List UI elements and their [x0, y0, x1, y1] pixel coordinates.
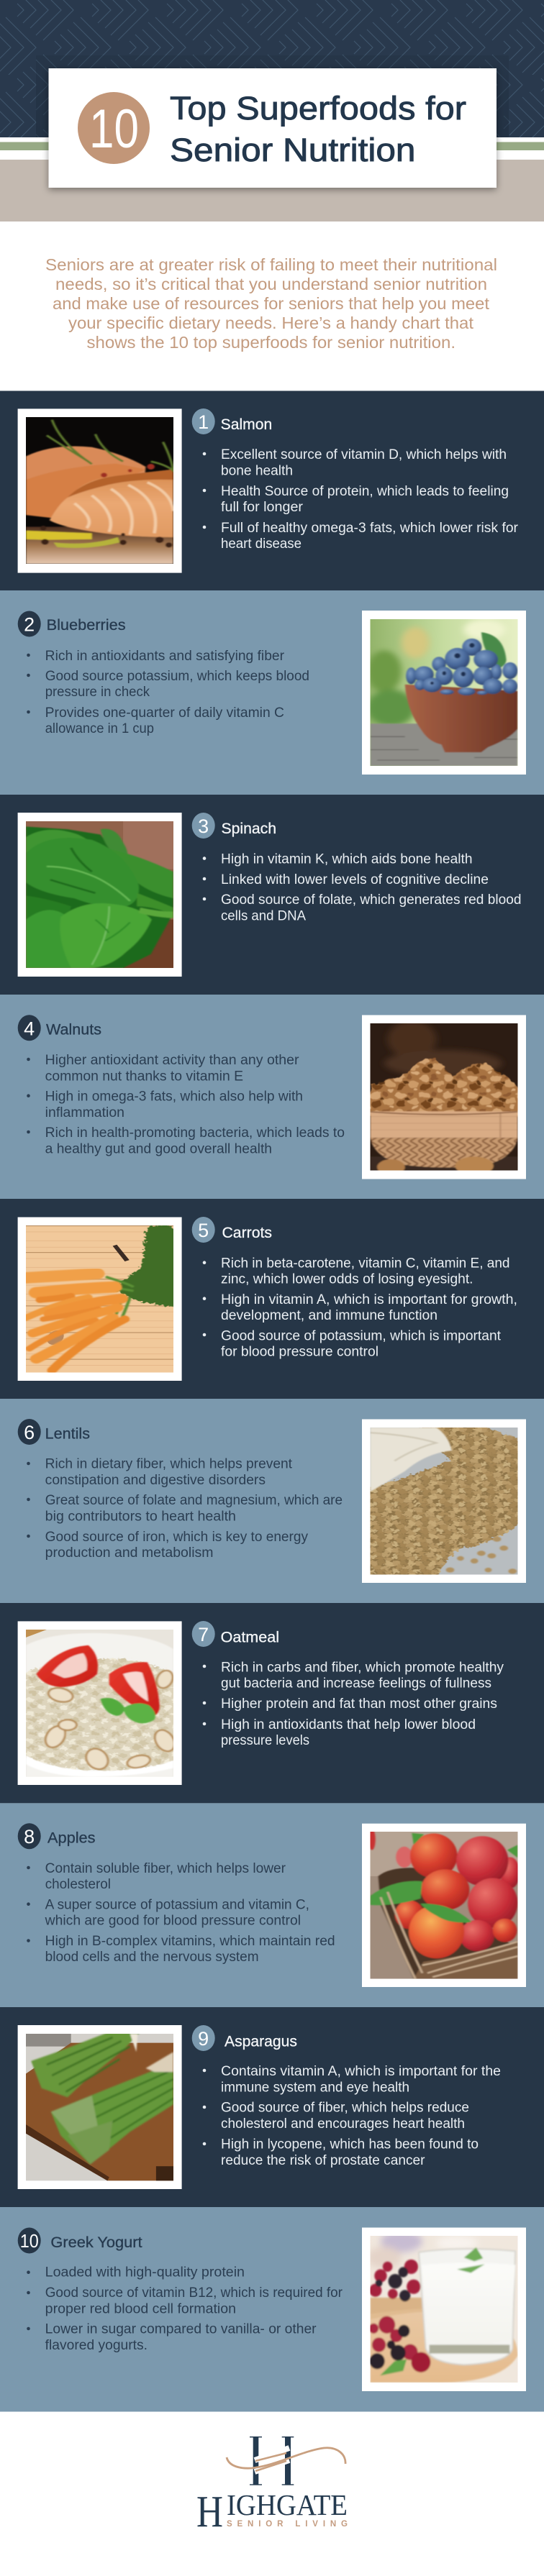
panel: salmon: [0, 391, 544, 590]
bullet list: lentils: big contributors to heart health: [45, 1509, 236, 1525]
title card: [49, 68, 497, 188]
bullet list: lentils: Great source of folate and magnesium, which are: [45, 1493, 343, 1508]
panel: spinach: [0, 795, 544, 995]
bullet list: oatmeal: gut bacteria and increase feelings of fullness: [221, 1676, 491, 1691]
number badge: 3: [192, 813, 215, 839]
photo: greek yogurt: [362, 2228, 526, 2391]
number badge: 7: [192, 1621, 215, 1647]
heading: Asparagus: Asparagus: [225, 2034, 297, 2050]
bullet list: lentils: constipation and digestive disorders: [45, 1473, 266, 1488]
number badge: 4: [18, 1015, 41, 1041]
logo wordmark: IGHGATE: [227, 2488, 348, 2521]
title heading: Senior Nutrition: [170, 132, 416, 168]
bullet list: lentils: production and metabolism: [45, 1545, 214, 1561]
bullet list: greek yogurt: Good source of vitamin B12, which is required for: [45, 2285, 343, 2301]
bullet list: walnuts: [27, 1053, 345, 1157]
bullet list: salmon: bone health: [221, 464, 293, 479]
bullet list: spinach: High in vitamin K, which aids bone health: [221, 852, 472, 867]
heading: Salmon: Salmon: [221, 416, 272, 433]
panel: oatmeal: [0, 1603, 544, 1803]
bullet list: salmon: heart disease: [221, 536, 302, 552]
bullet list: lentils: Rich in dietary fiber, which helps prevent: [45, 1457, 293, 1472]
bullet list: walnuts: common nut thanks to vitamin E: [45, 1069, 243, 1084]
intro paragraph: your specific dietary needs. Here’s a handy chart that: [68, 314, 473, 332]
number badge: 10: 10: [20, 2230, 39, 2252]
heading: Blueberries: Blueberries: [47, 617, 126, 634]
bullet list: apples: which are good for blood pressure control: [45, 1914, 301, 1929]
panel: asparagus: [0, 2007, 544, 2207]
bullet list: apples: Contain soluble fiber, which helps lower: [45, 1861, 286, 1876]
bullet list: greek yogurt: Lower in sugar compared to vanilla- or other: [45, 2321, 317, 2337]
bullet list: carrots: for blood pressure control: [221, 1345, 378, 1360]
bullet list: greek yogurt: [27, 2265, 343, 2353]
bullet list: blueberries: Rich in antioxidants and satisfying fiber: [45, 649, 285, 664]
photo: asparagus: [18, 2025, 182, 2189]
bullet list: walnuts: Higher antioxidant activity than any other: [45, 1053, 299, 1068]
number badge: 4: 4: [24, 1018, 35, 1039]
title heading: [170, 90, 466, 168]
bullet list: carrots: High in vitamin A, which is important for growth,: [221, 1292, 517, 1307]
bullet list: walnuts: High in omega-3 fats, which also help with: [45, 1090, 303, 1105]
bullet list: spinach: [203, 852, 521, 923]
bullet list: asparagus: reduce the risk of prostate cancer: [221, 2153, 425, 2168]
bullet list: asparagus: High in lycopene, which has been found to: [221, 2137, 479, 2152]
bullet list: walnuts: a healthy gut and good overall health: [45, 1142, 272, 1157]
photo: apples: [362, 1824, 526, 1987]
logo mark: H with swoosh: [227, 2436, 345, 2485]
number badge: 7: 7: [198, 1624, 209, 1645]
logo wordmark: H: [196, 2488, 223, 2536]
bullet list: blueberries: Provides one-quarter of daily vitamin C: [45, 705, 284, 721]
photo: spinach: [18, 813, 182, 977]
logo tagline: SENIOR LIVING: [227, 2520, 348, 2529]
number badge: 9: [192, 2025, 215, 2051]
bullet list: walnuts: Rich in health-promoting bacteria, which leads to: [45, 1125, 345, 1141]
intro paragraph: needs, so it’s critical that you understand senior nutrition: [55, 275, 487, 293]
bullet list: salmon: Excellent source of vitamin D, which helps with: [221, 447, 507, 462]
heading: Apples: Apples: [47, 1830, 95, 1847]
heading: Carrots: Carrots: [222, 1225, 272, 1241]
bullet list: spinach: Good source of folate, which generates red blood: [221, 892, 521, 908]
bullet list: carrots: development, and immune function: [221, 1308, 438, 1323]
bullet list: spinach: cells and DNA: [221, 908, 306, 923]
bullet list: blueberries: Good source potassium, which keeps blood: [45, 669, 309, 684]
bullet list: blueberries: allowance in 1 cup: [45, 721, 154, 736]
bullet list: apples: [27, 1861, 335, 1965]
number badge: 5: 5: [198, 1220, 209, 1241]
logo wordmark: [196, 2488, 348, 2536]
bullet list: oatmeal: Higher protein and fat than most other grains: [221, 1696, 497, 1712]
panel: greek yogurt: [0, 2207, 544, 2412]
heading: Spinach: Spinach: [222, 821, 276, 837]
number badge: 9: 9: [198, 2028, 209, 2050]
bullet list: apples: A super source of potassium and vitamin C,: [45, 1898, 309, 1913]
bullet list: carrots: zinc, which lower odds of losing eyesight.: [221, 1272, 473, 1287]
photo: salmon: [18, 408, 182, 573]
photo: lentils: [362, 1420, 526, 1583]
bullet list: apples: cholesterol: [45, 1877, 111, 1892]
bullet list: lentils: [27, 1457, 343, 1561]
photo: carrots: [18, 1217, 182, 1381]
panel: lentils: [0, 1399, 544, 1603]
photo: blueberries: [362, 611, 526, 775]
number badge: 8: [18, 1823, 41, 1849]
bullet list: lentils: Good source of iron, which is key to energy: [45, 1530, 308, 1545]
bullet list: spinach: Linked with lower levels of cognitive decline: [221, 872, 489, 887]
bullet list: carrots: Good source of potassium, which is important: [221, 1329, 502, 1343]
bullet list: apples: High in B-complex vitamins, which maintain red: [45, 1934, 335, 1949]
panel: apples: [0, 1803, 544, 2007]
bullet list: salmon: Full of healthy omega-3 fats, which lower risk for: [221, 521, 519, 536]
bullet list: oatmeal: [203, 1660, 504, 1748]
bullet list: carrots: [203, 1256, 517, 1360]
bullet list: apples: blood cells and the nervous system: [45, 1950, 259, 1965]
number badge: 6: [18, 1419, 41, 1445]
number badge: 2: 2: [24, 614, 35, 636]
bullet list: asparagus: cholesterol and encourages heart health: [221, 2116, 465, 2132]
heading: Lentils: Lentils: [45, 1426, 90, 1443]
bullet list: asparagus: immune system and eye health: [221, 2081, 409, 2096]
panel: walnuts: [0, 995, 544, 1199]
panel: blueberries: [0, 590, 544, 795]
bullet list: asparagus: Contains vitamin A, which is important for the: [221, 2064, 501, 2079]
intro paragraph: Seniors are at greater risk of failing to meet their nutritional: [45, 255, 497, 274]
header background: [0, 0, 544, 221]
intro paragraph: shows the 10 top superfoods for senior nutrition.: [86, 333, 455, 352]
bullet list: greek yogurt: Loaded with high-quality protein: [45, 2265, 245, 2280]
bullet list: salmon: full for longer: [221, 500, 304, 515]
photo: walnuts: [362, 1015, 526, 1179]
bullet list: asparagus: Good source of fiber, which helps reduce: [221, 2100, 469, 2116]
bullet list: blueberries: [27, 649, 309, 736]
bullet list: asparagus: [203, 2064, 501, 2168]
photo: oatmeal: [18, 1621, 182, 1785]
title heading: Top Superfoods for: [170, 90, 466, 127]
heading: Oatmeal: Oatmeal: [221, 1629, 279, 1645]
number badge: 5: [192, 1217, 215, 1243]
intro paragraph: and make use of resources for seniors that help you meet: [53, 294, 489, 313]
number badge: 8: 8: [24, 1826, 35, 1847]
number badge: 1: [192, 408, 215, 434]
heading: Greek Yogurt: Greek Yogurt: [50, 2234, 142, 2251]
logo: Highgate Senior Living: [196, 2436, 348, 2536]
intro paragraph: [45, 255, 497, 352]
bullet list: salmon: [203, 447, 519, 552]
bullet list: greek yogurt: flavored yogurts.: [45, 2338, 148, 2353]
bullet list: oatmeal: Rich in carbs and fiber, which promote healthy: [221, 1660, 504, 1676]
bullet list: carrots: Rich in beta-carotene, vitamin C, vitamin E, and: [221, 1256, 509, 1271]
number badge: 2: [18, 611, 41, 637]
bullet list: blueberries: pressure in check: [45, 685, 150, 700]
bullet list: greek yogurt: proper red blood cell formation: [45, 2302, 236, 2317]
number badge: 1: 1: [198, 411, 209, 433]
number badge: 10: 10: [89, 99, 139, 160]
bullet list: walnuts: inflammation: [45, 1105, 124, 1120]
number badge: 3: 3: [198, 816, 209, 837]
bullet list: oatmeal: pressure levels: [221, 1733, 309, 1748]
heading: Walnuts: Walnuts: [46, 1021, 101, 1038]
panel: carrots: [0, 1199, 544, 1399]
number badge: 6: 6: [24, 1422, 35, 1443]
bullet list: oatmeal: High in antioxidants that help lower blood: [221, 1717, 476, 1732]
bullet list: salmon: Health Source of protein, which leads to feeling: [221, 484, 509, 499]
